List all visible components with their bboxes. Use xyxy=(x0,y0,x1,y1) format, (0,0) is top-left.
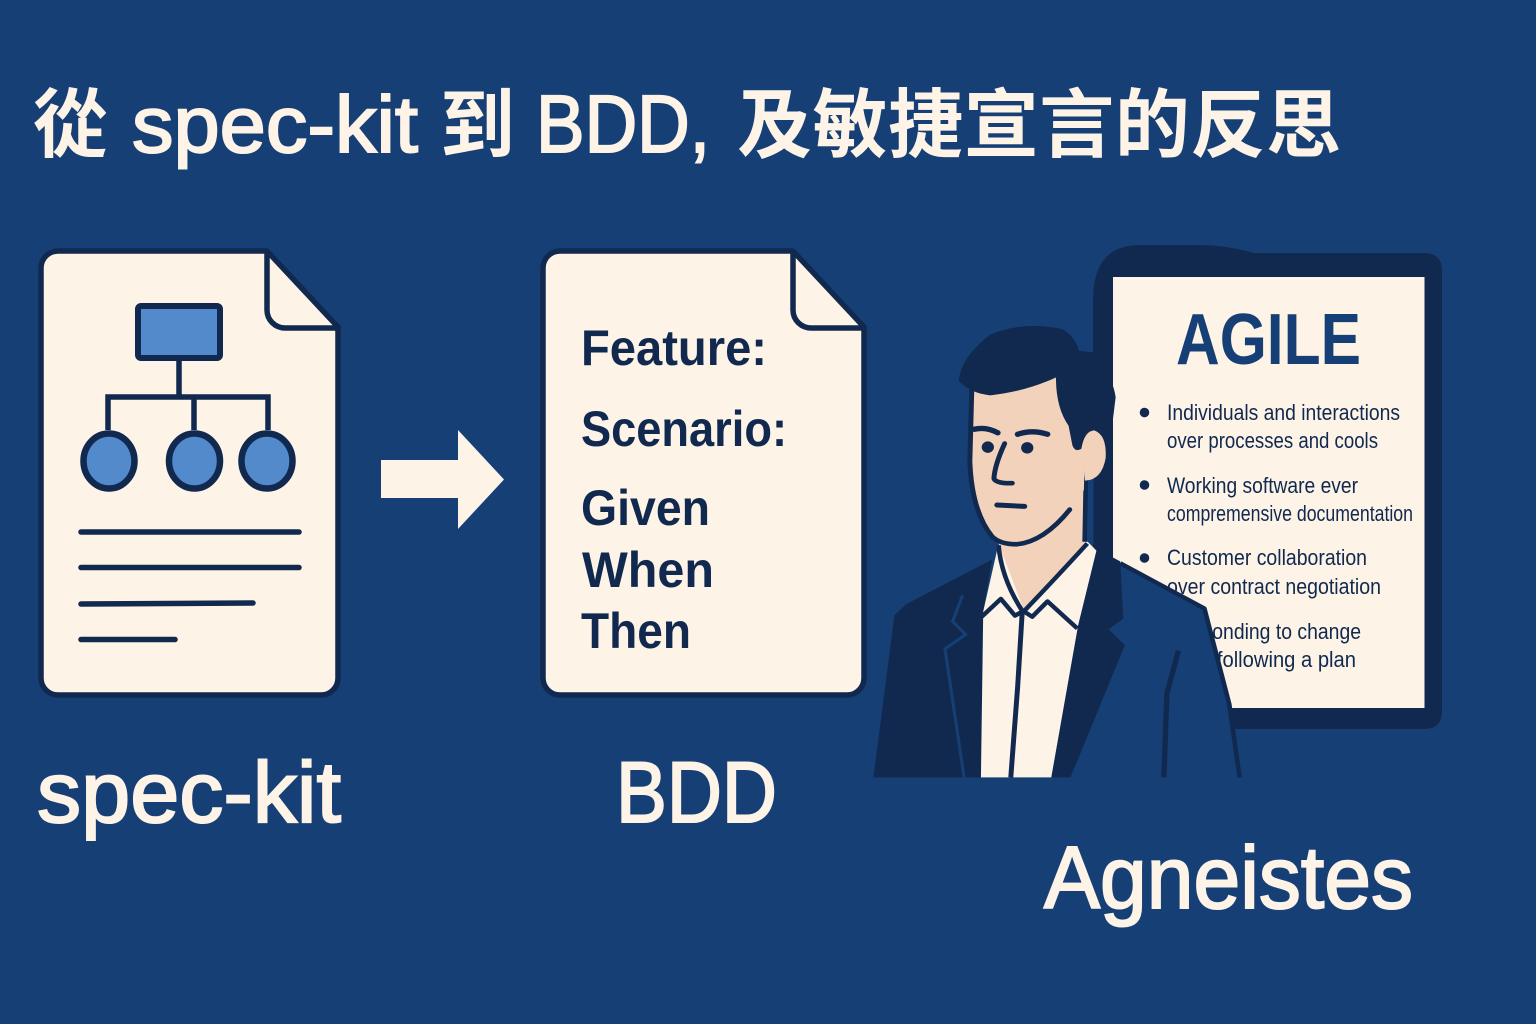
title xyxy=(33,79,1341,170)
manifesto list: Working software ever xyxy=(1167,473,1358,498)
jacket left side xyxy=(873,560,992,777)
shirt xyxy=(981,542,1097,777)
tablet frame xyxy=(1093,245,1442,729)
hierarchy diagram xyxy=(84,306,292,488)
tablet screen xyxy=(1113,277,1424,708)
manifesto list: over contract negotiation xyxy=(1167,574,1381,599)
AGILE heading: AGILE xyxy=(1176,300,1361,380)
person in blazer xyxy=(873,326,1242,777)
title: 到 xyxy=(440,83,515,167)
manifesto list: over following a plan xyxy=(1172,647,1356,672)
jacket right side fill xyxy=(1051,563,1242,777)
title: 及敏捷宣言的反思 xyxy=(737,83,1341,167)
collar and placket xyxy=(982,544,1087,777)
text lines xyxy=(81,532,299,640)
manifesto list: Responding to change xyxy=(1167,619,1361,644)
gherkin keywords xyxy=(581,320,787,659)
document sheet xyxy=(543,251,864,695)
title: spec-kit xyxy=(132,80,418,169)
document: BDD xyxy=(543,251,864,695)
manifesto list: compremensive documentation xyxy=(1167,501,1413,526)
neck edge xyxy=(1085,480,1086,542)
title: 從 xyxy=(33,83,108,167)
label: Agneistes: Agneistes xyxy=(1044,828,1413,927)
gherkin keywords: Scenario: xyxy=(581,401,787,457)
manifesto list: Individuals and interactions xyxy=(1167,400,1400,425)
manifesto list xyxy=(1140,400,1413,672)
facial features xyxy=(974,428,1048,506)
neck gap xyxy=(1086,479,1093,544)
arrow xyxy=(381,430,504,529)
ear xyxy=(1081,430,1106,481)
hair xyxy=(959,326,1116,450)
gherkin keywords: When xyxy=(582,542,714,598)
gherkin keywords: Then xyxy=(581,603,691,659)
gherkin keywords: Feature: xyxy=(581,320,767,376)
document icon: spec-kit xyxy=(41,251,338,695)
left lapel edge xyxy=(945,595,966,777)
manifesto list: Customer collaboration xyxy=(1167,545,1367,570)
manifesto list: over processes and cools xyxy=(1167,428,1378,453)
face xyxy=(970,376,1086,544)
gherkin keywords: Given xyxy=(581,480,710,536)
agile manifesto tablet xyxy=(1093,245,1442,729)
neck xyxy=(999,483,1086,611)
jacket right outline xyxy=(1120,563,1240,777)
folded corner xyxy=(267,252,338,328)
label: BDD: BDD xyxy=(616,745,777,841)
title: BDD, xyxy=(536,79,710,170)
document sheet xyxy=(41,251,338,695)
face outline xyxy=(970,390,1070,544)
label: spec-kit: spec-kit xyxy=(37,745,341,841)
right lapel xyxy=(1051,547,1125,777)
folded corner xyxy=(793,252,864,328)
jacket fold xyxy=(1164,651,1178,777)
